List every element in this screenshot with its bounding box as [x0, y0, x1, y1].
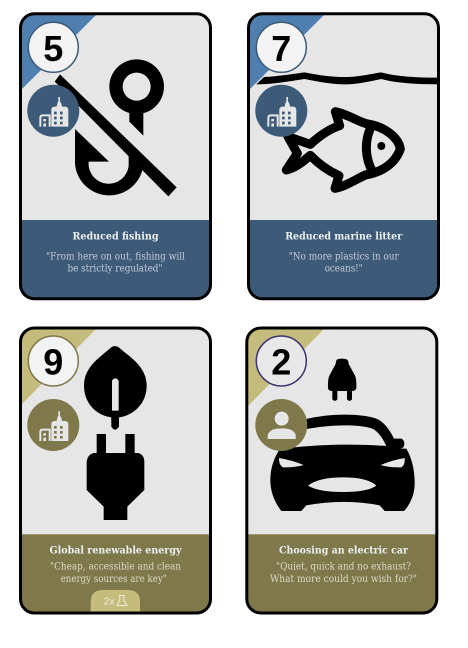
title: Reduced fishing	[72, 230, 159, 242]
number badge 5	[28, 22, 78, 72]
quote text: "No more plastics in our	[289, 251, 399, 262]
icon: person badge	[255, 399, 307, 451]
panel: card 9 global renewable energy	[20, 328, 210, 613]
panel: card 7 reduced marine litter	[248, 14, 438, 299]
number badge 5: 5	[43, 28, 63, 69]
icon: fish	[286, 112, 400, 188]
wave line	[256, 72, 438, 84]
quote text: oceans!"	[325, 264, 363, 275]
panel: card 5 reduced fishing	[20, 14, 210, 299]
cost tab: 2x	[104, 595, 116, 607]
number badge 2: 2	[271, 342, 291, 382]
cost tab	[91, 590, 140, 612]
icon: city badge	[27, 399, 79, 451]
title: Global renewable energy	[50, 544, 182, 556]
title: Reduced marine litter	[285, 230, 403, 242]
icon: city badge	[255, 85, 307, 137]
quote text: "From here on out, fishing will	[46, 251, 185, 262]
quote text	[50, 561, 181, 585]
quote text: What more could you wish for?"	[270, 574, 417, 585]
quote text	[289, 251, 399, 275]
number badge 9	[28, 336, 78, 386]
number badge 7	[256, 22, 306, 72]
quote text: "Quiet, quick and no exhaust?	[276, 561, 411, 572]
quote text	[270, 561, 417, 585]
number badge 2	[256, 336, 306, 386]
quote text: be strictly regulated"	[68, 264, 162, 275]
icon: leaf and plug	[84, 346, 147, 520]
quote text	[46, 251, 185, 275]
panel: card 2 choosing an electric car	[247, 328, 437, 613]
icon: city badge	[27, 85, 79, 137]
icon: small plug	[328, 359, 356, 401]
icon: crossed-out fish hook	[55, 59, 177, 196]
icon: electric car	[270, 415, 415, 511]
quote text: "Cheap, accessible and clean	[50, 561, 181, 572]
number badge 7: 7	[271, 28, 291, 69]
number badge 9: 9	[43, 342, 63, 382]
quote text: energy sources are key"	[61, 574, 167, 585]
title: Choosing an electric car	[279, 544, 408, 556]
